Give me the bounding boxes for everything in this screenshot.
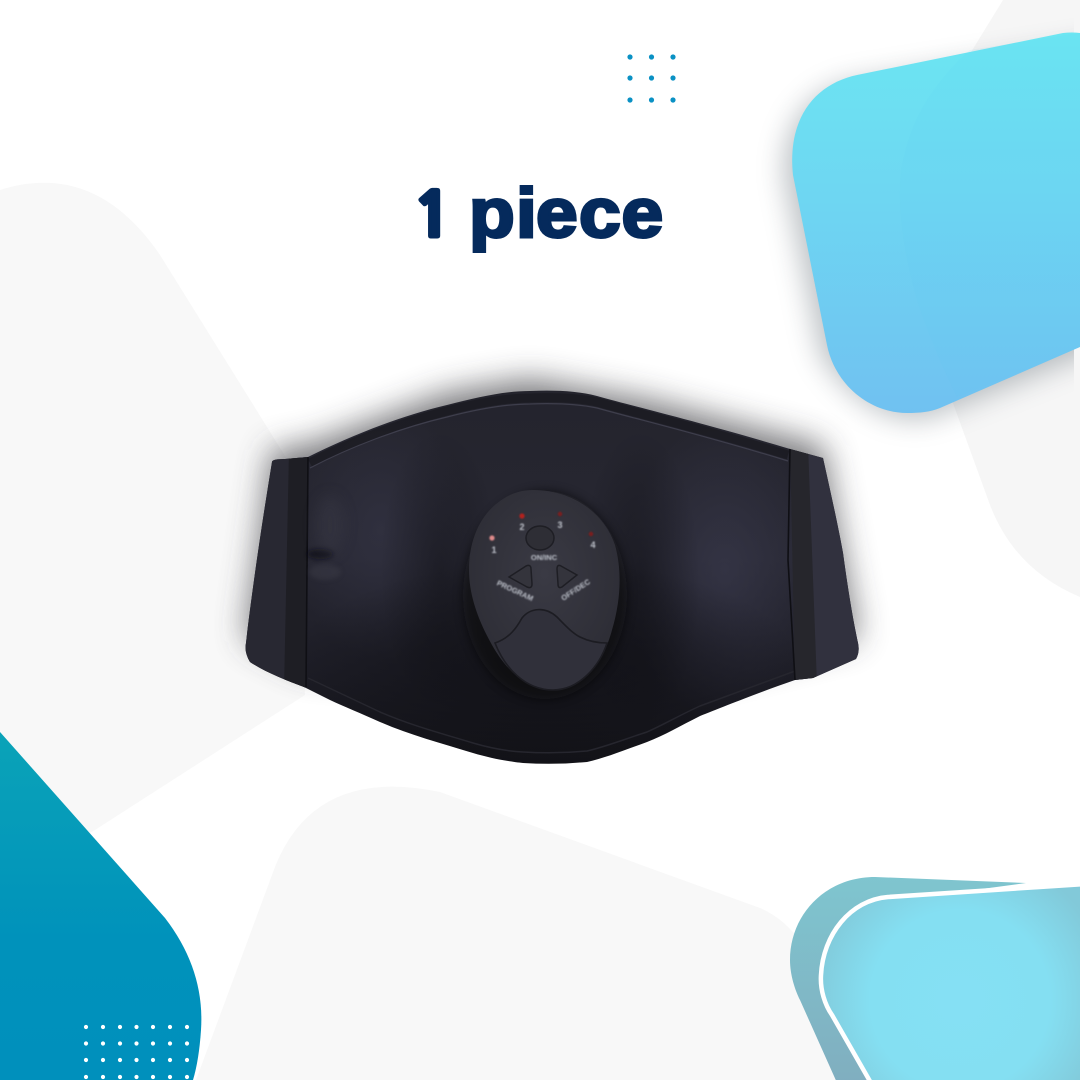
belt shadow: [246, 379, 858, 688]
top hem band: [310, 398, 788, 463]
unit labels: 2: [519, 522, 525, 532]
on/inc button: [526, 526, 554, 550]
right strap band: [790, 449, 816, 680]
shape: top right blue panel: [785, 32, 1080, 419]
background shape: right pale grey panel: [900, 0, 1080, 597]
left strap: [246, 457, 306, 688]
control unit shadow: [463, 491, 627, 699]
unit labels: 4: [590, 540, 596, 550]
unit labels: ON/INC: [531, 553, 558, 562]
unit labels: 3: [557, 520, 563, 530]
background shape: bottom pale grey panel: [196, 787, 840, 1080]
shape: bottom right layered panel: [790, 877, 1080, 1080]
unit labels: OFF/DEC: [559, 577, 592, 603]
unit labels: 1: [491, 545, 497, 555]
indicator lights: [489, 512, 593, 541]
right strap: [791, 449, 859, 680]
hem stitching: [310, 404, 788, 468]
wrinkle near left strap: [307, 549, 333, 559]
background shape: left pale grey panel: [0, 183, 305, 880]
belt body: [246, 391, 859, 764]
product: belt with control unit: [240, 379, 870, 780]
decorative dots: top: [627, 54, 676, 103]
shape: bottom left teal panel: [0, 732, 201, 1080]
decorative dots: bottom left: [84, 1025, 189, 1079]
program button: [509, 565, 532, 588]
off/dec button: [557, 565, 577, 588]
belt shading, straps and seams: [240, 398, 870, 780]
unit labels: [491, 520, 596, 603]
left strap band: [284, 450, 308, 695]
lower cap: [495, 610, 607, 690]
control unit: [469, 490, 620, 690]
seams: [306, 448, 795, 687]
title: 1 piece: [413, 174, 663, 252]
unit labels: PROGRAM: [495, 578, 535, 603]
